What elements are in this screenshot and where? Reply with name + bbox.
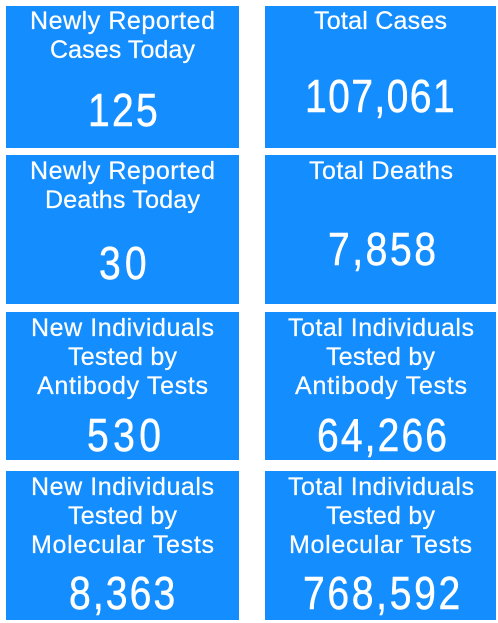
number: 30: 30	[99, 238, 147, 290]
heading: new individuals tested by molecular tests: New Individuals	[31, 473, 214, 501]
panel: total individuals tested by molecular tests	[265, 471, 496, 620]
heading: total individuals tested by antibody tests: Tested by	[326, 343, 436, 371]
heading: new individuals tested by molecular tests: Tested by	[68, 502, 178, 530]
panel: new individuals tested by molecular tests	[6, 471, 239, 620]
heading: total individuals tested by molecular tests: Tested by	[326, 502, 436, 530]
heading: total individuals tested by molecular tests	[288, 473, 474, 559]
heading: new individuals tested by antibody tests	[31, 314, 214, 400]
panel: total deaths	[265, 155, 496, 304]
number: 7,858: 7,858	[328, 224, 436, 276]
heading: total individuals tested by molecular tests: Molecular Tests	[289, 531, 472, 559]
heading: new individuals tested by antibody tests: Antibody Tests	[37, 372, 208, 400]
panel: total cases	[265, 6, 496, 148]
panel: newly reported deaths today	[6, 155, 239, 304]
panel: total individuals tested by antibody tests	[265, 312, 496, 462]
number: 64,266: 64,266	[317, 410, 447, 462]
heading: new individuals tested by antibody tests: Tested by	[68, 343, 178, 371]
number: 125: 125	[88, 85, 158, 137]
heading: total individuals tested by molecular tests: Total Individuals	[288, 473, 474, 501]
heading: total individuals tested by antibody tests	[288, 314, 474, 400]
heading: new individuals tested by molecular tests: Molecular Tests	[31, 531, 214, 559]
heading: total cases: Total Cases	[314, 7, 447, 35]
heading: newly reported cases today: Newly Reported	[30, 7, 215, 35]
heading: new individuals tested by molecular tests	[31, 473, 214, 559]
heading: newly reported deaths today	[30, 157, 215, 214]
panel: newly reported cases today	[6, 6, 239, 148]
number: 530: 530	[87, 410, 161, 462]
number: 8,363: 8,363	[69, 568, 175, 620]
number: 768,592: 768,592	[303, 568, 460, 620]
heading: newly reported deaths today: Newly Reported	[30, 157, 215, 185]
heading: total individuals tested by antibody tests: Antibody Tests	[295, 372, 467, 400]
panel: new individuals tested by antibody tests	[6, 312, 239, 462]
heading: total individuals tested by antibody tests: Total Individuals	[288, 314, 474, 342]
heading: newly reported cases today: Cases Today	[50, 36, 196, 64]
number: 107,061: 107,061	[305, 71, 455, 123]
heading: newly reported deaths today: Deaths Today	[45, 186, 200, 214]
heading: newly reported cases today	[30, 7, 215, 64]
heading: new individuals tested by antibody tests: New Individuals	[31, 314, 214, 342]
heading: total deaths: Total Deaths	[309, 157, 453, 185]
